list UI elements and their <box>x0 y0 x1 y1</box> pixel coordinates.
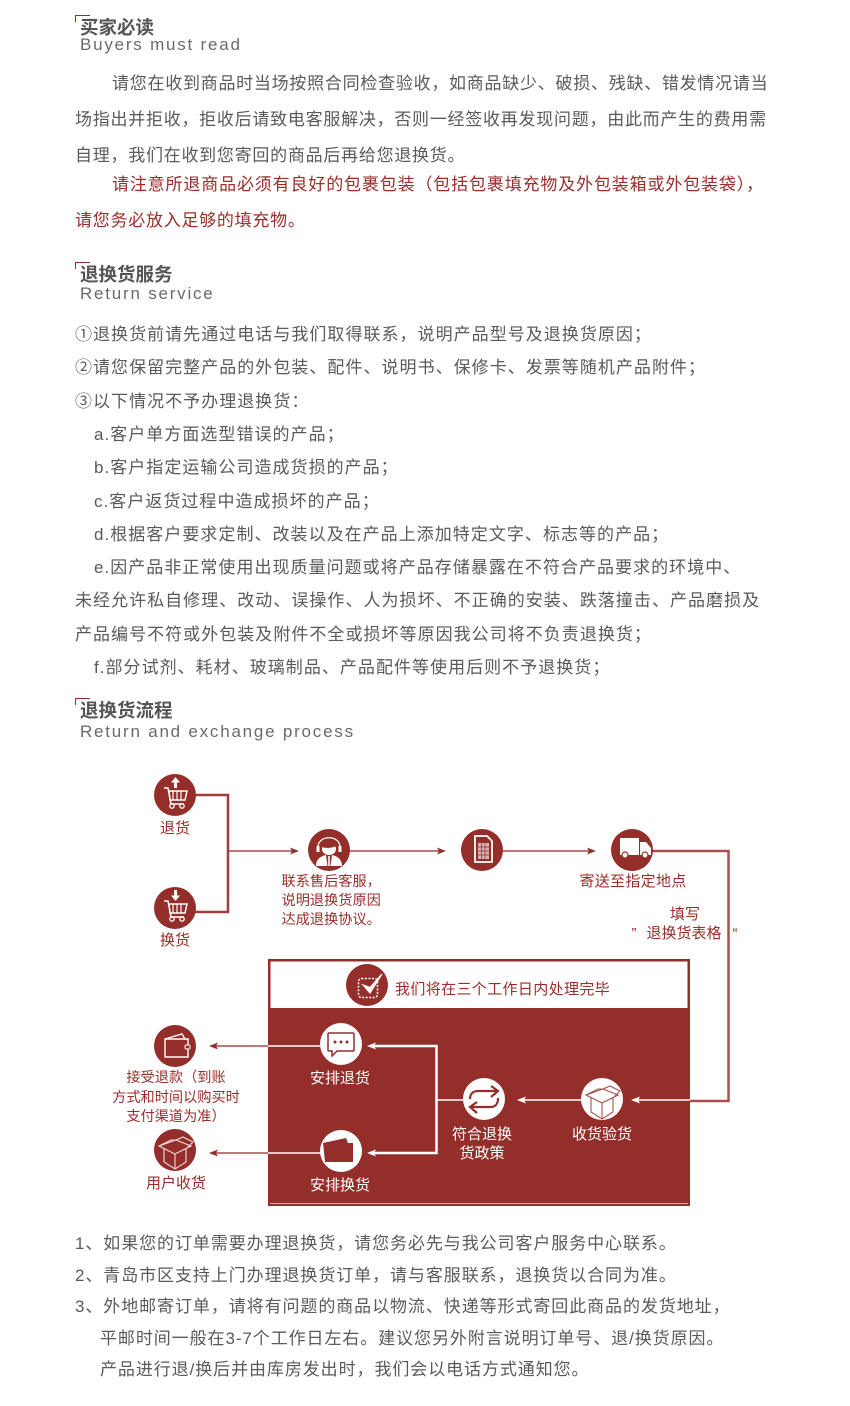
text block: return service terms: 产品编号不符或外包装及附件不全或损坏等原因我公司将不负责退换货； <box>75 625 652 644</box>
label: meets policy: 符合退换 <box>452 1126 512 1143</box>
text block: closing notes: 2、青岛市区支持上门办理退换货订单，请与客服联系，退换货以合同为准。 <box>75 1266 677 1285</box>
icon: inspection box <box>581 1078 623 1120</box>
label: contact customer service: 达成退换协议。 <box>282 911 381 928</box>
icon: policy exchange arrows <box>463 1078 505 1120</box>
icon: delivery truck <box>611 829 653 871</box>
heading: return and exchange process: 退换货流程 <box>80 700 173 721</box>
text block: inspection notice: 场指出并拒收，拒收后请致电客服解决，否则一经签收再发现问题，由此而产生的费用需 <box>75 110 767 129</box>
label: fill in form: “ <box>732 925 738 942</box>
label: fill in form: 退换货表格 <box>646 925 722 942</box>
text block: return service terms: 未经允许私自修理、改动、误操作、人为损坏、不正确的安装、跌落撞击、产品磨损及 <box>75 591 760 610</box>
label: return: 退货 <box>160 820 190 837</box>
heading: buyers must read: 买家必读 <box>80 17 154 38</box>
arrow: head to arrange exchange <box>367 1150 376 1156</box>
label: user receives: 用户收货 <box>146 1175 206 1192</box>
text block: closing notes: 1、如果您的订单需要办理退换货，请您务必先与我公司客户服务中心联系。 <box>75 1234 677 1253</box>
arrow: inspection to policy check <box>517 1096 582 1104</box>
label: contact customer service: 说明退换货原因 <box>282 892 381 909</box>
arrow: to shipping <box>502 848 596 854</box>
panel: processing box <box>268 959 690 1206</box>
icon: dashed checkbox <box>346 964 388 1006</box>
text block: return service terms: c.客户返货过程中造成损坏的产品； <box>94 492 380 510</box>
text block: inspection notice: 请您在收到商品时当场按照合同检查验收，如商品缺少、破损、残缺、错发情况请当 <box>112 74 768 93</box>
text block: closing notes <box>75 1234 730 1379</box>
icon: form document <box>461 829 503 871</box>
arrow: to refund <box>209 1042 322 1050</box>
label: three working days: 我们将在三个工作日内处理完毕 <box>395 981 610 998</box>
text block: return service terms: d.根据客户要求定制、改装以及在产品上添加特定文字、标志等的产品； <box>94 525 669 544</box>
label: accept refund: 接受退款（到账 <box>126 1069 226 1086</box>
heading: buyers must read: Buyers must read <box>80 35 242 54</box>
text block: return service terms: ②请您保留完整产品的外包装、配件、说明书、保修卡、发票等随机产品附件； <box>75 358 706 377</box>
text block: return service terms <box>75 325 760 677</box>
heading: return service: Return service <box>80 284 215 303</box>
icon: exchange cart <box>154 887 196 929</box>
text block: closing notes: 3、外地邮寄订单，请将有问题的商品以物流、快递等形式寄回此商品的发货地址， <box>75 1297 730 1316</box>
arrow: head to arrange return <box>367 1042 376 1050</box>
label: fill in form: 填写 <box>670 906 700 923</box>
text block: inspection notice <box>75 74 768 165</box>
connector: policy branch <box>374 1046 464 1153</box>
text block: closing notes: 产品进行退/换后并由库房发出时，我们会以电话方式通知您。 <box>100 1360 589 1379</box>
icon: user receipt box <box>154 1129 196 1171</box>
heading: return and exchange process: Return and exchange process <box>80 722 355 741</box>
icon: arrange exchange folder <box>320 1130 362 1172</box>
icon: arrange return message <box>320 1023 362 1065</box>
heading: return service: 退换货服务 <box>80 264 173 285</box>
label: accept refund: 方式和时间以购买时 <box>112 1090 240 1106</box>
text block: return service terms: a.客户单方面选型错误的产品； <box>94 425 345 444</box>
text block: return service terms: ①退换货前请先通过电话与我们取得联系，说明产品型号及退换货原因； <box>75 325 652 344</box>
label: arrange exchange: 安排换货 <box>310 1177 370 1194</box>
text block: return service terms: ③以下情况不予办理退换货： <box>75 392 309 411</box>
label: accept refund: 支付渠道为准） <box>126 1109 226 1125</box>
arrow: into inspection <box>631 1096 690 1104</box>
label: meets policy: 货政策 <box>459 1145 505 1162</box>
label: exchange: 换货 <box>160 932 190 949</box>
text block: packaging notice <box>75 175 764 230</box>
label: fill in form: ” <box>632 925 636 942</box>
arrow: to customer service <box>228 848 299 854</box>
icon: customer service agent <box>308 829 350 871</box>
arrow: to form icon <box>348 848 446 854</box>
text block: packaging notice: 请您务必放入足够的填充物。 <box>75 211 306 230</box>
label: fill in form <box>632 906 738 942</box>
label: ship to location: 寄送至指定地点 <box>579 872 687 890</box>
text block: packaging notice: 请注意所退商品必须有良好的包裹包装（包括包裹填充物及外包装箱或外包装袋）， <box>112 175 764 194</box>
text block: inspection notice: 自理，我们在收到您寄回的商品后再给您退换货。 <box>75 146 465 165</box>
icon: refund wallet <box>154 1025 196 1067</box>
arrow: to user receipt <box>209 1150 322 1156</box>
icon: return cart <box>154 774 196 816</box>
label: contact customer service: 联系售后客服， <box>282 873 381 890</box>
heading: buyers must read <box>75 15 242 54</box>
heading: return service <box>75 262 215 303</box>
label: arrange return: 安排退货 <box>310 1070 370 1087</box>
label: contact customer service <box>282 873 381 928</box>
label: receipt inspection: 收货验货 <box>572 1126 632 1143</box>
label: accept refund <box>112 1069 240 1125</box>
heading: return and exchange process <box>75 698 355 741</box>
label: meets policy <box>452 1126 512 1162</box>
text block: return service terms: e.因产品非正常使用出现质量问题或将产品存储暴露在不符合产品要求的环境中、 <box>94 558 741 577</box>
connector: shipping to processing box <box>652 851 728 1101</box>
connector: return and exchange merge <box>194 795 228 912</box>
text block: closing notes: 平邮时间一般在3-7个工作日左右。建议您另外附言说明订单号、退/换货原因。 <box>100 1329 724 1348</box>
text block: return service terms: f.部分试剂、耗材、玻璃制品、产品配件等使用后则不予退换货； <box>94 658 610 677</box>
text block: return service terms: b.客户指定运输公司造成货损的产品； <box>94 458 399 477</box>
